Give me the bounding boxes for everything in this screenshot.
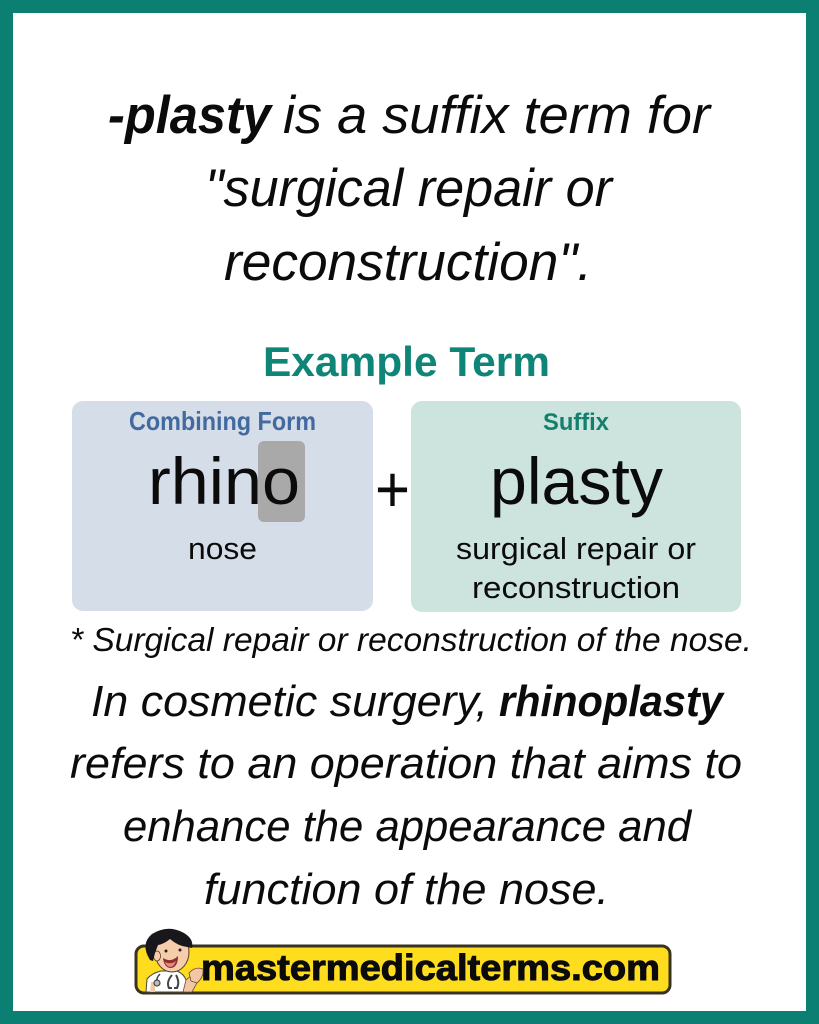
explanation text: rhinoplasty [499,677,725,726]
explanation text: function of the nose. [204,865,609,914]
panel: suffix [411,401,741,612]
meaning: nose: nose [188,531,257,566]
title [108,86,712,292]
label: suffix: Suffix [543,409,610,436]
meaning: surgical repair or reconstruction [456,531,696,605]
title: is a suffix term for [283,86,712,145]
highlight behind letter o [258,441,305,522]
icon: cartoon doctor [145,929,203,992]
heading: example term: Example Term [263,338,550,385]
website address: mastermedicalterms.com [201,947,660,988]
title: "surgical repair or [205,159,614,218]
word: rhino: rhino [148,444,300,518]
meaning: surgical repair or reconstruction: surgical repair or [456,531,696,566]
website banner [136,929,670,993]
plus sign: + [375,452,410,526]
explanation text: enhance the appearance and [123,802,693,851]
footnote: * Surgical repair or reconstruction of the nose. [70,621,752,658]
panel: combining form [72,401,373,611]
title: reconstruction". [224,233,592,292]
meaning: surgical repair or reconstruction: reconstruction [472,570,680,605]
title: -plasty [108,86,273,145]
word: plasty: plasty [490,444,663,518]
label: combining form: Combining Form [129,406,316,436]
explanation text: In cosmetic surgery, [91,677,488,726]
explanation text: refers to an operation that aims to [70,739,742,788]
explanation text [70,677,742,914]
